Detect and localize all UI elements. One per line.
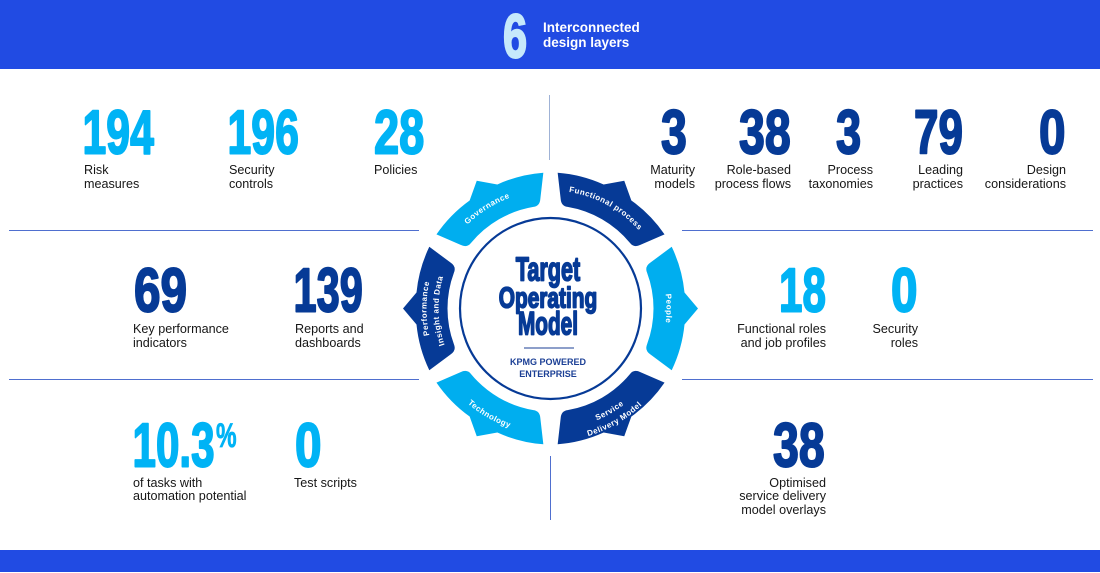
segment: functional process bbox=[558, 172, 664, 246]
header band bbox=[0, 0, 1100, 71]
stat: functional roles bbox=[737, 257, 826, 350]
stat: design considerations: Design bbox=[1027, 163, 1066, 177]
centre circle bbox=[460, 218, 641, 399]
stat: reports and dashboards: Reports and bbox=[295, 322, 364, 336]
stat: role-based process flows: 38 bbox=[739, 97, 791, 167]
centre subtitle: ENTERPRISE bbox=[519, 369, 577, 379]
stat: policies: 28 bbox=[374, 98, 424, 167]
stat: service delivery model overlays: 38 bbox=[773, 410, 825, 480]
stat: leading practices: practices bbox=[913, 177, 963, 191]
segment: performance insight and data bbox=[403, 246, 455, 370]
segment: functional process: Functional process bbox=[569, 186, 642, 230]
header number: 6 bbox=[503, 3, 527, 71]
segment: service delivery model bbox=[558, 370, 664, 444]
stat: security roles bbox=[872, 255, 919, 350]
stat: key performance indicators: Key performance bbox=[133, 322, 229, 336]
stat: test scripts: Test scripts bbox=[294, 476, 357, 490]
stat: automation potential bbox=[132, 412, 246, 503]
stat: leading practices: 79 bbox=[914, 98, 963, 167]
centre title bbox=[499, 251, 597, 342]
stat: automation potential: 10.3 bbox=[132, 412, 215, 481]
centre title: Operating bbox=[499, 282, 597, 314]
stat: service delivery model overlays bbox=[739, 410, 827, 517]
stat: design considerations: considerations bbox=[985, 177, 1066, 191]
segment: performance insight and data: Performance bbox=[421, 282, 430, 336]
stat: process taxonomies: taxonomies bbox=[809, 177, 873, 191]
stat: reports and dashboards: dashboards bbox=[295, 336, 361, 350]
stat: risk measures: measures bbox=[84, 177, 139, 191]
stat: functional roles: Functional roles bbox=[737, 322, 826, 336]
stat: leading practices: Leading bbox=[918, 163, 963, 177]
stat: key performance indicators: 69 bbox=[134, 255, 187, 325]
stat: design considerations bbox=[985, 97, 1066, 191]
header caption: design layers bbox=[543, 35, 629, 50]
stat: functional roles: 18 bbox=[779, 257, 826, 326]
segment: governance bbox=[436, 172, 544, 246]
stat: maturity models: 3 bbox=[661, 97, 687, 167]
stat: security controls: Security bbox=[229, 163, 275, 177]
stat: test scripts: 0 bbox=[295, 410, 322, 480]
stat: security controls: controls bbox=[229, 177, 273, 191]
segment: governance: Governance bbox=[464, 194, 509, 224]
centre subtitle: KPMG POWERED bbox=[510, 357, 586, 367]
stat: risk measures: Risk bbox=[84, 163, 109, 177]
stat: service delivery model overlays: Optimised bbox=[769, 476, 826, 490]
segment: service delivery model: Delivery Model bbox=[587, 401, 642, 436]
stat: automation potential: automation potential bbox=[133, 489, 246, 503]
stat: risk measures: 194 bbox=[82, 99, 154, 167]
stat: key performance indicators bbox=[133, 255, 229, 350]
header caption: Interconnected bbox=[543, 20, 640, 35]
segment: people bbox=[646, 246, 698, 370]
stat: key performance indicators: indicators bbox=[133, 336, 187, 350]
stat: role-based process flows: process flows bbox=[715, 177, 791, 191]
stat: functional roles: and job profiles bbox=[741, 336, 826, 350]
stat: security roles: roles bbox=[891, 336, 918, 350]
stat: policies: Policies bbox=[374, 163, 417, 177]
stat: automation potential: % bbox=[216, 418, 237, 455]
stat: process taxonomies bbox=[809, 98, 873, 191]
segment: performance insight and data: Insight and Data bbox=[433, 276, 444, 346]
stat: service delivery model overlays: service delivery bbox=[739, 489, 827, 503]
segment: technology bbox=[436, 370, 544, 444]
stat: maturity models: Maturity bbox=[650, 163, 696, 177]
stat: security roles: Security bbox=[872, 322, 919, 336]
stat: service delivery model overlays: model overlays bbox=[741, 503, 826, 517]
segment: service delivery model: Service bbox=[595, 402, 623, 420]
stat: security controls: 196 bbox=[228, 99, 299, 167]
stat: test scripts bbox=[294, 410, 357, 490]
centre title: Model bbox=[518, 306, 578, 342]
stat: role-based process flows bbox=[715, 97, 791, 191]
segment: technology: Technology bbox=[469, 399, 511, 428]
stat: maturity models bbox=[650, 97, 696, 191]
centre title: Target bbox=[516, 251, 580, 288]
stat: maturity models: models bbox=[654, 177, 695, 191]
stat: role-based process flows: Role-based bbox=[727, 163, 791, 177]
segment: people: People bbox=[664, 294, 672, 322]
stat: process taxonomies: Process bbox=[828, 163, 873, 177]
divider lines bbox=[9, 95, 1093, 520]
footer band bbox=[0, 550, 1100, 572]
operating model wheel bbox=[403, 172, 698, 444]
stat: process taxonomies: 3 bbox=[836, 98, 861, 167]
stat: design considerations: 0 bbox=[1039, 97, 1066, 167]
stat: automation potential: of tasks with bbox=[133, 476, 202, 490]
stat: reports and dashboards: 139 bbox=[294, 256, 363, 326]
stat: security roles: 0 bbox=[891, 255, 918, 325]
